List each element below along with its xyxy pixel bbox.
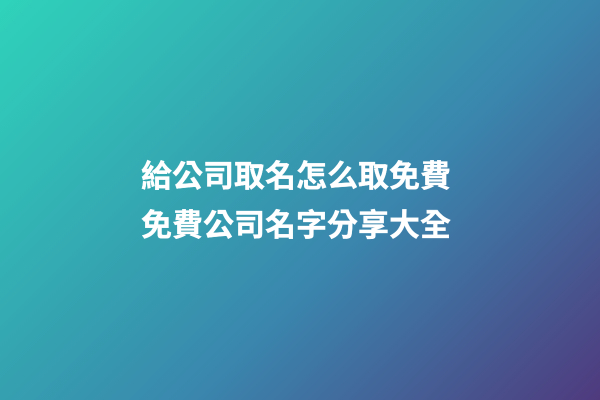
title [141,151,451,245]
title line 1: 給公司取名怎么取免費 [141,151,451,196]
title line 2: 免費公司名字分享大全 [141,200,451,245]
